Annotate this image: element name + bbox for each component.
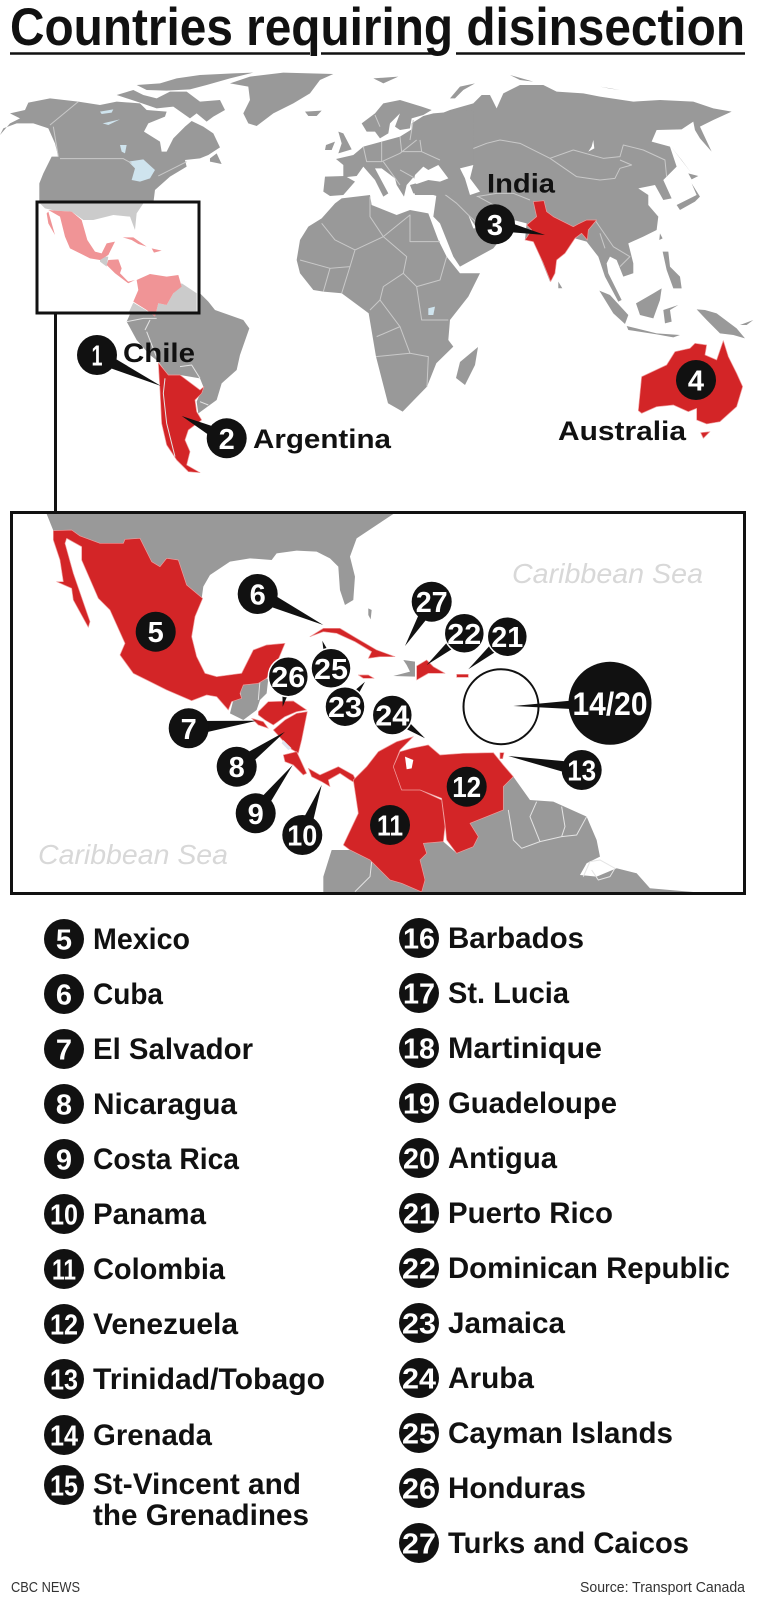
legend item 7: 7 — [56, 1034, 72, 1066]
legend item 10: 10 — [50, 1200, 78, 1232]
bubble 23: 23 — [328, 692, 362, 724]
label Chile: Chile — [123, 338, 195, 368]
bubble 9: 9 — [248, 799, 264, 831]
legend item 15: the Grenadines — [93, 1499, 309, 1532]
legend item 9: 9 — [56, 1144, 72, 1176]
bubble 3 India: 3 — [487, 210, 503, 242]
legend item 24: Aruba — [448, 1362, 534, 1395]
legend item 18: Martinique — [448, 1032, 602, 1065]
legend item 23: Jamaica — [448, 1307, 565, 1340]
map: Southeast Asia and Australia — [599, 252, 753, 438]
legend item 17: 17 — [403, 978, 435, 1010]
legend item 27: Turks and Caicos — [448, 1527, 689, 1560]
inset frame — [12, 512, 744, 894]
legend item 13: 13 — [50, 1364, 78, 1396]
map: North America and Greenland — [0, 73, 333, 203]
legend item 13: Trinidad/Tobago — [93, 1363, 325, 1396]
legend item 24: 24 — [402, 1364, 436, 1396]
bubble 9 — [236, 765, 293, 833]
legend item 14 — [44, 1415, 212, 1455]
legend item 11: Colombia — [93, 1253, 225, 1286]
bubble 1 Chile — [77, 335, 161, 386]
legend item 21: 21 — [403, 1198, 435, 1230]
legend item 17: St. Lucia — [448, 977, 569, 1010]
bubble 2 Argentina: 2 — [219, 424, 235, 456]
legend item 22 — [399, 1248, 730, 1288]
legend item 21 — [399, 1193, 613, 1233]
legend item 11: 11 — [52, 1254, 76, 1286]
map: India — [525, 201, 597, 282]
legend item 16 — [399, 918, 584, 958]
legend item 19 — [399, 1083, 617, 1123]
bubble 14/20 — [513, 662, 652, 745]
legend: right column — [399, 918, 730, 1563]
legend item 25: 25 — [402, 1418, 436, 1450]
bubble 7: 7 — [181, 714, 197, 746]
map: Europe — [305, 100, 480, 197]
legend item 8: Nicaragua — [93, 1088, 237, 1121]
legend item 5: 5 — [56, 924, 72, 956]
legend item 22: 22 — [402, 1254, 436, 1286]
map: South America — [127, 290, 249, 473]
legend item 5: Mexico — [93, 923, 190, 956]
legend item 25: Cayman Islands — [448, 1417, 673, 1450]
legend item 19: 19 — [403, 1088, 435, 1120]
legend item 10 — [44, 1194, 206, 1234]
legend item 9 — [44, 1139, 239, 1179]
bubble 13: 13 — [567, 756, 596, 788]
legend item 14: Grenada — [93, 1419, 212, 1452]
legend item 17 — [399, 973, 569, 1013]
bubble 27 — [405, 582, 452, 646]
bubble 22 — [427, 613, 484, 665]
bubble 6 — [238, 574, 323, 625]
legend item 8 — [44, 1084, 237, 1124]
inset locator box — [37, 202, 199, 512]
locator ring for eastern Caribbean islands — [464, 669, 538, 744]
source line: Source: Transport Canada — [580, 1579, 746, 1596]
bubble 12 — [447, 767, 487, 807]
legend item 20 — [399, 1138, 557, 1178]
world map — [0, 73, 753, 473]
bubble 7 — [169, 708, 257, 748]
legend item 12: Venezuela — [93, 1308, 238, 1341]
legend item 14: 14 — [50, 1420, 78, 1452]
legend item 15: St-Vincent and — [93, 1468, 301, 1501]
legend item 6: Cuba — [93, 978, 163, 1011]
legend item 6: 6 — [56, 980, 72, 1012]
legend item 5 — [44, 919, 190, 959]
bubble 22: 22 — [447, 619, 481, 651]
inset east: Caribbean islands and South America — [310, 608, 693, 892]
legend item 13 — [44, 1359, 325, 1399]
bubble 1 Chile: 1 — [92, 340, 102, 372]
bubble 24: 24 — [375, 700, 409, 732]
bubble 4 Australia: 4 — [688, 366, 704, 398]
legend item 26: Honduras — [448, 1472, 586, 1505]
bubble 10: 10 — [287, 820, 317, 852]
label Caribbean Sea east: Caribbean Sea — [512, 558, 703, 589]
legend item 27: 27 — [402, 1528, 436, 1560]
bubble 5 — [136, 612, 176, 652]
bubble 25 — [311, 641, 351, 688]
bubble 12: 12 — [452, 772, 481, 804]
bubble 26 — [268, 657, 308, 707]
legend item 16: 16 — [403, 924, 435, 956]
bubble 13 — [508, 750, 602, 790]
legend item 11 — [44, 1249, 225, 1289]
bubble 25: 25 — [314, 654, 348, 686]
legend item 23: 23 — [402, 1308, 436, 1340]
legend item 25 — [399, 1413, 673, 1453]
legend item 24 — [399, 1358, 534, 1398]
bubble 4 Australia — [676, 360, 716, 400]
legend item 27 — [399, 1523, 689, 1563]
legend item 7 — [44, 1029, 253, 1069]
legend item 10: Panama — [93, 1198, 206, 1231]
legend item 8: 8 — [56, 1090, 72, 1122]
legend item 12: 12 — [50, 1310, 78, 1342]
map: Africa — [297, 195, 480, 412]
legend item 20: 20 — [403, 1144, 435, 1176]
legend item 26: 26 — [402, 1474, 436, 1506]
bubble 8: 8 — [229, 752, 245, 784]
legend item 21: Puerto Rico — [448, 1197, 613, 1230]
legend item 16: Barbados — [448, 922, 584, 955]
legend item 12 — [44, 1304, 238, 1344]
bubble 11 — [370, 805, 410, 845]
map: Australia — [638, 341, 743, 438]
label India: India — [487, 168, 556, 198]
label Australia: Australia — [558, 416, 687, 446]
legend item 19: Guadeloupe — [448, 1087, 617, 1120]
bubble 10 — [282, 785, 322, 855]
legend item 26 — [399, 1468, 586, 1508]
map: Asia — [373, 75, 732, 302]
bubble 6: 6 — [250, 580, 266, 612]
bubble 21: 21 — [491, 622, 523, 654]
bubble 21 — [468, 617, 527, 669]
legend item 22: Dominican Republic — [448, 1252, 730, 1285]
bubble 14/20: 14/20 — [572, 686, 648, 722]
legend: left column — [44, 919, 325, 1532]
legend item 18: 18 — [403, 1034, 435, 1066]
bubble 11: 11 — [377, 810, 403, 842]
bubble 24 — [372, 695, 425, 738]
legend item 20: Antigua — [448, 1142, 557, 1175]
legend item 15 — [44, 1465, 309, 1532]
label Caribbean Sea west: Caribbean Sea — [38, 839, 228, 870]
legend item 6 — [44, 974, 163, 1014]
bubble 23 — [325, 682, 365, 727]
bubble 8 — [217, 732, 285, 787]
bubble 3 India — [475, 204, 545, 244]
map: Madagascar — [456, 347, 478, 385]
bubble 2 Argentina — [182, 416, 247, 458]
panel: Caribbean inset map — [12, 512, 744, 894]
credit: CBC News: CBC NEWS — [11, 1579, 80, 1596]
bubble 5: 5 — [148, 617, 164, 649]
map: Chile and Argentina — [158, 363, 204, 473]
legend item 7: El Salvador — [93, 1033, 253, 1066]
legend item 18 — [399, 1028, 602, 1068]
bubble 26: 26 — [271, 662, 305, 694]
label Argentina: Argentina — [253, 424, 392, 454]
legend item 15: 15 — [50, 1470, 78, 1502]
legend item 9: Costa Rica — [93, 1143, 239, 1176]
legend item 23 — [399, 1303, 565, 1343]
bubble 27: 27 — [416, 587, 448, 619]
inset west: Mexico and Central America — [47, 514, 393, 787]
